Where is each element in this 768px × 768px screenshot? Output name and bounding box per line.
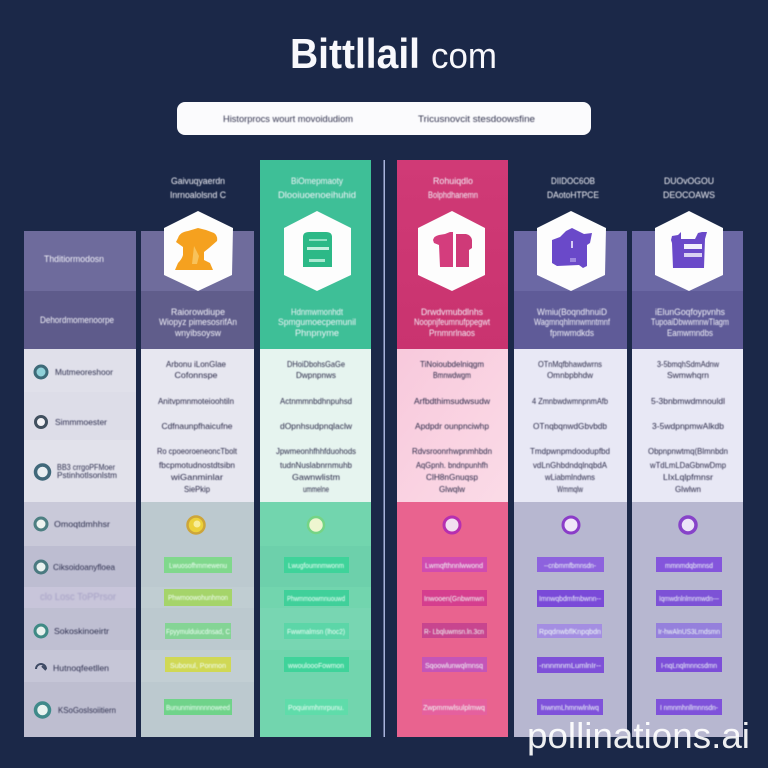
column 4 cell text: OTnMqfbhawdwrns <box>538 359 602 369</box>
column 1 heading <box>170 176 226 200</box>
column 4 pills: -nnnmnmLumlnIr-- <box>539 663 602 670</box>
column 2 pills: Phwmmoowmnuouwd <box>287 596 345 603</box>
column 5 cell text: 5-3bnbmwdmnouldl <box>651 396 725 406</box>
row label 9 <box>36 703 116 717</box>
column 1 pills: Phwmoowohunhmon <box>168 595 228 602</box>
column 2 cell text: Dwpnpnws <box>296 370 336 380</box>
column 1 pills: Lwuosofhmmewenu <box>169 563 227 570</box>
column 2 heading <box>278 176 356 200</box>
column 2 description <box>278 307 356 338</box>
column 3 heading: Bolphdhanemn <box>428 190 478 200</box>
column 4 heading <box>547 176 599 200</box>
row label 7 <box>35 625 109 637</box>
column 4 pills: --cnbmmfbmnsdn- <box>544 563 597 570</box>
column 1 heading: Inrnoalolsnd C <box>170 190 226 200</box>
row label 3: BB3 crrgoPFMoer <box>57 462 115 472</box>
column 5 cell text: Swmwhqrn <box>667 370 709 380</box>
panel: row labels <box>24 231 136 737</box>
column 1 pills: Fpyymulduiucdnsad, C <box>166 629 230 636</box>
column 2 cell text: DHoiDbohsGaGe <box>287 359 345 369</box>
column 3 description <box>414 307 490 338</box>
column 3 pills: Inwooen(Gnbwmwn <box>424 596 484 603</box>
column 3 cell text <box>412 359 492 494</box>
row label 9: KSoGoslsoiitiern <box>58 705 116 715</box>
column 2 pills: Lwugfoumnmwonm <box>288 563 344 570</box>
icon: green badge <box>284 211 351 291</box>
column 5 pills: I nmnmhnllmnnsdn- <box>660 705 719 712</box>
column 4 pills: Imnwqbdmfmbwnn-- <box>539 596 602 603</box>
column 1 cell text: SiePkip <box>184 484 210 494</box>
column 2 status dot <box>308 517 324 533</box>
column 5 cell text: LIxLqlpfmnsr <box>663 472 713 482</box>
column 3 description: Drwdvmubdlnhs <box>421 307 483 317</box>
column 5 cell text: Glwlwn <box>675 484 701 494</box>
row label 1 <box>35 366 113 378</box>
column 5 cell text: wTdLmLDaGbnwDmp <box>649 460 726 470</box>
column 3 description: Noopnjfeumnufppegwt <box>414 317 490 327</box>
column 5 description: iElunGoqfoypvnhs <box>655 307 725 317</box>
column 3 status dot <box>444 517 460 533</box>
column 4 cell text: wLiabmlndwns <box>544 472 595 482</box>
column 3 pills: Sqoowlunwqlmnsq <box>425 663 483 670</box>
row label 7: Sokoskinoeirtr <box>54 626 109 636</box>
panel: column 5 <box>632 176 743 737</box>
column 5 cell text <box>648 359 728 494</box>
subtitle bar: Historprocs wourt movoidudiom <box>223 114 353 124</box>
column 3 heading <box>428 176 478 200</box>
label: header one: Thditiormodosn <box>44 254 104 264</box>
column 2 description: Spmgumoecpemunil <box>278 317 356 327</box>
column 3 cell text: Bmnwdwgm <box>433 370 471 380</box>
column 4 description <box>534 307 610 338</box>
column 1 cell text <box>157 359 238 494</box>
watermark: pollinations.ai <box>527 715 750 756</box>
panel: column 4 <box>514 176 627 737</box>
column 2 heading: Dlooiuoenoeihuhid <box>278 190 356 200</box>
subtitle bar <box>177 102 591 135</box>
column 2 cell text: dOpnhsudpnqlaclw <box>280 421 353 431</box>
column 4 description: Wagmnqhlmnwmntmnf <box>534 317 610 327</box>
panel: column 2 highlighted green <box>260 160 371 737</box>
column 3 cell text: Arfbdthimsudwsudw <box>414 396 491 406</box>
column 1 status dot <box>188 516 204 534</box>
column 1 cell text: Cofonnspe <box>174 370 218 380</box>
column 3 pills <box>422 557 487 715</box>
column 5 description <box>651 307 729 338</box>
column 1 description: Raiorowdiupe <box>171 307 225 317</box>
icon: purple frame badge <box>655 211 723 291</box>
column 2 description: Hdnmwmonhdt <box>291 307 343 317</box>
column 5 cell text: Obpnpnwtmq(Blmnbdn <box>648 446 728 456</box>
column 4 heading: DIIDOC6OB <box>551 176 595 186</box>
row label 2 <box>36 416 107 428</box>
column 3 cell text: ClH8nGnuqsp <box>426 472 478 482</box>
row label 4 <box>35 518 110 530</box>
column 3 cell text: AqGpnh. bndnpunhfh <box>416 460 488 470</box>
column 4 pills <box>537 557 604 715</box>
column 3 pills: R- Lbqluwmsn.ln.3cn <box>424 629 484 636</box>
row label 2: Simmmoester <box>55 417 107 427</box>
icon: pink badge <box>418 211 485 291</box>
column 5 heading: DEOCOAWS <box>663 190 715 200</box>
column 4 description: fpmwmdkds <box>550 328 594 338</box>
column 4 cell text: 4 ZmnbwdwmnpnmAfb <box>532 396 608 406</box>
column 4 cell text <box>530 359 610 494</box>
column 1 cell text: Ro cpoeoroeneoncTbolt <box>157 446 238 456</box>
column 4 cell text: Omnbpbhdw <box>547 370 594 380</box>
column 4 pills: lnwnmLhmnwlnlwq <box>541 705 599 712</box>
title <box>290 30 497 77</box>
column 3 pills: Lwmqfthnnlwwond <box>425 563 483 570</box>
title: Bittllail <box>290 30 420 77</box>
column 5 description: Eamwmndbs <box>667 328 713 338</box>
column 1 cell text: Arbonu iLonGlae <box>166 359 226 369</box>
column 2 cell text: Jpwmeonhfhhfduohods <box>276 446 356 456</box>
column 2 heading: BiOmepmaoty <box>291 176 343 186</box>
column 2 cell text: tudnNuslabnrnmuhb <box>280 460 352 470</box>
column 2 description: Phnpnyme <box>295 328 339 338</box>
row label 3: Pstinhotlsonlstm <box>57 470 117 480</box>
column 2 cell text: ummelne <box>303 484 329 494</box>
row label 8: Hutnoqfeetllen <box>53 663 109 673</box>
column 1 pills <box>164 557 232 715</box>
icon: orange badge <box>164 211 233 291</box>
column 1 pills: Bununmimnnnnoweed <box>166 705 230 712</box>
column 4 cell text: OTnqbqnwdGbvbdb <box>533 421 607 431</box>
column 4 heading: DAotoHTPCE <box>547 190 599 200</box>
column 3 cell text: TiNoioubdelniqgm <box>420 359 484 369</box>
column 2 pills: Poquinmhmrpunu. <box>288 705 344 712</box>
title: com <box>431 35 497 76</box>
column 1 cell text: Anitvpmnmoteioohtiln <box>158 396 234 406</box>
column 3 heading: Rohuiqdlo <box>433 176 473 186</box>
column 1 cell text: Cdfnaunpfhaicufne <box>162 421 233 431</box>
column 3 cell text: Rdvsroonrhwpnmhbdn <box>412 446 492 456</box>
row label 3 <box>36 462 117 480</box>
column 4 description: Wmiu(BoqndhnuiD <box>537 307 607 317</box>
column 1 description <box>159 307 237 338</box>
row label 5 <box>35 561 115 573</box>
column 5 pills: Ir-hwAlnUS3Lrndsmn <box>658 629 720 636</box>
subtitle bar: Tricusnovcit stesdoowsfine <box>418 114 535 124</box>
column 4 pills: RpqdnwbflKnpqbdn <box>539 629 601 636</box>
column 1 cell text: wiGanminlar <box>170 472 223 482</box>
column 5 heading: DUOvOGOU <box>664 176 714 186</box>
panel: column 1 <box>141 176 254 737</box>
column 2 pills: wwouloooFowmon <box>287 663 344 670</box>
column 3 description: Prnmnrlnaos <box>429 328 475 338</box>
column 3 cell text: Apdpdr ounpnciwhp <box>415 421 489 431</box>
column 5 heading <box>663 176 715 200</box>
column 2 pills <box>284 557 349 715</box>
column 5 cell text: 3-5wdpnpmwAlkdb <box>652 421 724 431</box>
column 4 cell text: vdLnGhbdndqlnqbdA <box>533 460 607 470</box>
column 3 pills: Zwpmmwlsulplmwq <box>423 705 485 712</box>
column 2 cell text <box>276 359 356 494</box>
column 4 cell text: Tmdpwnpmdoodupfbd <box>530 446 610 456</box>
column 1 heading: Gaivuqyaerdn <box>171 176 225 186</box>
column 5 description: TupoaiDbwwmnwTlagm <box>651 317 729 327</box>
row label 5: Ciksoidoanyfloea <box>53 562 115 572</box>
row label 4: Omoqtdmhhsr <box>54 519 110 529</box>
column 5 pills <box>656 557 722 715</box>
column 4 status dot <box>563 517 579 533</box>
column 5 cell text: 3-5bmqhSdmAdnw <box>657 359 720 369</box>
row label 1: Mutmeoreshoor <box>55 367 113 377</box>
column 1 description: wnyibsoysw <box>174 328 221 338</box>
panel: column 3 highlighted pink <box>397 160 508 737</box>
column 3 cell text: Glwqlw <box>439 484 466 494</box>
column 2 cell text: Actnmmnbdhnpuhsd <box>280 396 352 406</box>
column 2 pills: Fwwmalmsn (lhoc2) <box>287 629 345 636</box>
column 2 cell text: Gawnwlistm <box>292 472 340 482</box>
column 1 description: Wiopyz pimesosrifAn <box>159 317 237 327</box>
column 1 pills: Subonul, Ponmon <box>170 663 226 670</box>
column divider <box>384 160 385 737</box>
column 5 pills: Iqmwdnlnlmnmwdn--- <box>659 596 720 603</box>
column 4 cell text: Wmmqlw <box>557 484 584 494</box>
label: header two: Dehordmomenoorpe <box>40 315 114 325</box>
icon: purple badge <box>537 211 606 291</box>
column 5 pills: I-nqLnqlmnncsdmn <box>661 663 717 670</box>
row label 6: clo Losc ToPPrsor <box>40 592 117 603</box>
column 5 status dot <box>680 517 696 533</box>
column 1 cell text: fbcpmotudnostdtsibn <box>159 460 235 470</box>
column 5 pills: mmnmdqbmnsd <box>665 563 713 570</box>
